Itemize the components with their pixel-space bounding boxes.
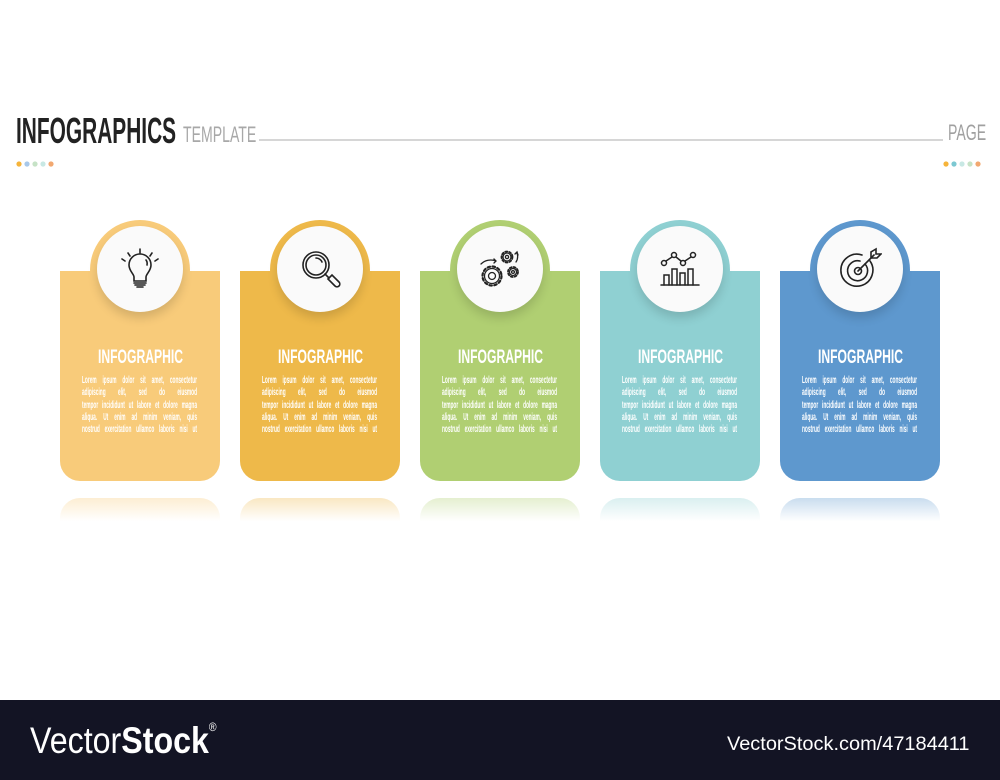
text block: aliqua. Ut enim ad minim veniam, quis bbox=[82, 412, 197, 423]
heading: INFOGRAPHIC bbox=[637, 347, 723, 368]
text block: tempor incididunt ut labore et dolore magna bbox=[82, 400, 197, 411]
text block: nostrud exercitation ullamco laboris nisi ut bbox=[622, 424, 737, 435]
text block: adipiscing elit, sed do eiusmod bbox=[802, 387, 917, 398]
page label: PAGE bbox=[948, 120, 986, 145]
text block: aliqua. Ut enim ad minim veniam, quis bbox=[262, 412, 377, 423]
text block: nostrud exercitation ullamco laboris nisi ut bbox=[442, 424, 557, 435]
dots left bbox=[16, 161, 54, 167]
panel: card 4 bbox=[600, 220, 760, 516]
text block: tempor incididunt ut labore et dolore magna bbox=[262, 400, 377, 411]
title bbox=[16, 110, 256, 151]
dots right bbox=[943, 161, 981, 167]
text block: aliqua. Ut enim ad minim veniam, quis bbox=[442, 412, 557, 423]
panel: card 5 bbox=[780, 220, 940, 518]
icon: chart bbox=[637, 226, 723, 312]
text block: tempor incididunt ut labore et dolore magna bbox=[442, 400, 557, 411]
text block: Lorem ipsum dolor sit amet, consectetur bbox=[262, 375, 377, 386]
text block: adipiscing elit, sed do eiusmod bbox=[622, 387, 737, 398]
logo: VectorStock® bbox=[30, 720, 217, 761]
text block: Lorem ipsum dolor sit amet, consectetur bbox=[442, 375, 557, 386]
panel: card 1 bbox=[60, 220, 220, 517]
text block: tempor incididunt ut labore et dolore magna bbox=[802, 400, 917, 411]
heading: INFOGRAPHIC bbox=[97, 347, 183, 368]
title: TEMPLATE bbox=[183, 122, 256, 147]
text block bbox=[442, 375, 558, 435]
text block: nostrud exercitation ullamco laboris nisi ut bbox=[802, 424, 917, 435]
text block: Lorem ipsum dolor sit amet, consectetur bbox=[802, 375, 917, 386]
heading: INFOGRAPHIC bbox=[457, 347, 543, 368]
text block: adipiscing elit, sed do eiusmod bbox=[82, 387, 197, 398]
footer bbox=[0, 700, 1000, 780]
text block: Lorem ipsum dolor sit amet, consectetur bbox=[82, 375, 197, 386]
text block: aliqua. Ut enim ad minim veniam, quis bbox=[622, 412, 737, 423]
heading: INFOGRAPHIC bbox=[277, 347, 363, 368]
text block bbox=[82, 375, 198, 435]
icon: magnifier bbox=[277, 226, 363, 312]
icon: gears bbox=[457, 226, 543, 312]
url: VectorStock.com/47184411 bbox=[727, 734, 970, 755]
text block: nostrud exercitation ullamco laboris nisi ut bbox=[262, 424, 377, 435]
icon: target bbox=[817, 226, 903, 312]
heading: INFOGRAPHIC bbox=[817, 347, 903, 368]
text block bbox=[802, 375, 918, 435]
title: INFOGRAPHICS bbox=[16, 110, 176, 151]
text block bbox=[622, 375, 738, 435]
text block: Lorem ipsum dolor sit amet, consectetur bbox=[622, 375, 737, 386]
text block: adipiscing elit, sed do eiusmod bbox=[262, 387, 377, 398]
text block: adipiscing elit, sed do eiusmod bbox=[442, 387, 557, 398]
text block: aliqua. Ut enim ad minim veniam, quis bbox=[802, 412, 917, 423]
text block bbox=[262, 375, 378, 435]
text block: nostrud exercitation ullamco laboris nisi ut bbox=[82, 424, 197, 435]
panel: card 3 bbox=[420, 220, 580, 518]
text block: tempor incididunt ut labore et dolore magna bbox=[622, 400, 737, 411]
icon: light bulb bbox=[97, 226, 183, 312]
panel: card 2 bbox=[240, 220, 400, 518]
